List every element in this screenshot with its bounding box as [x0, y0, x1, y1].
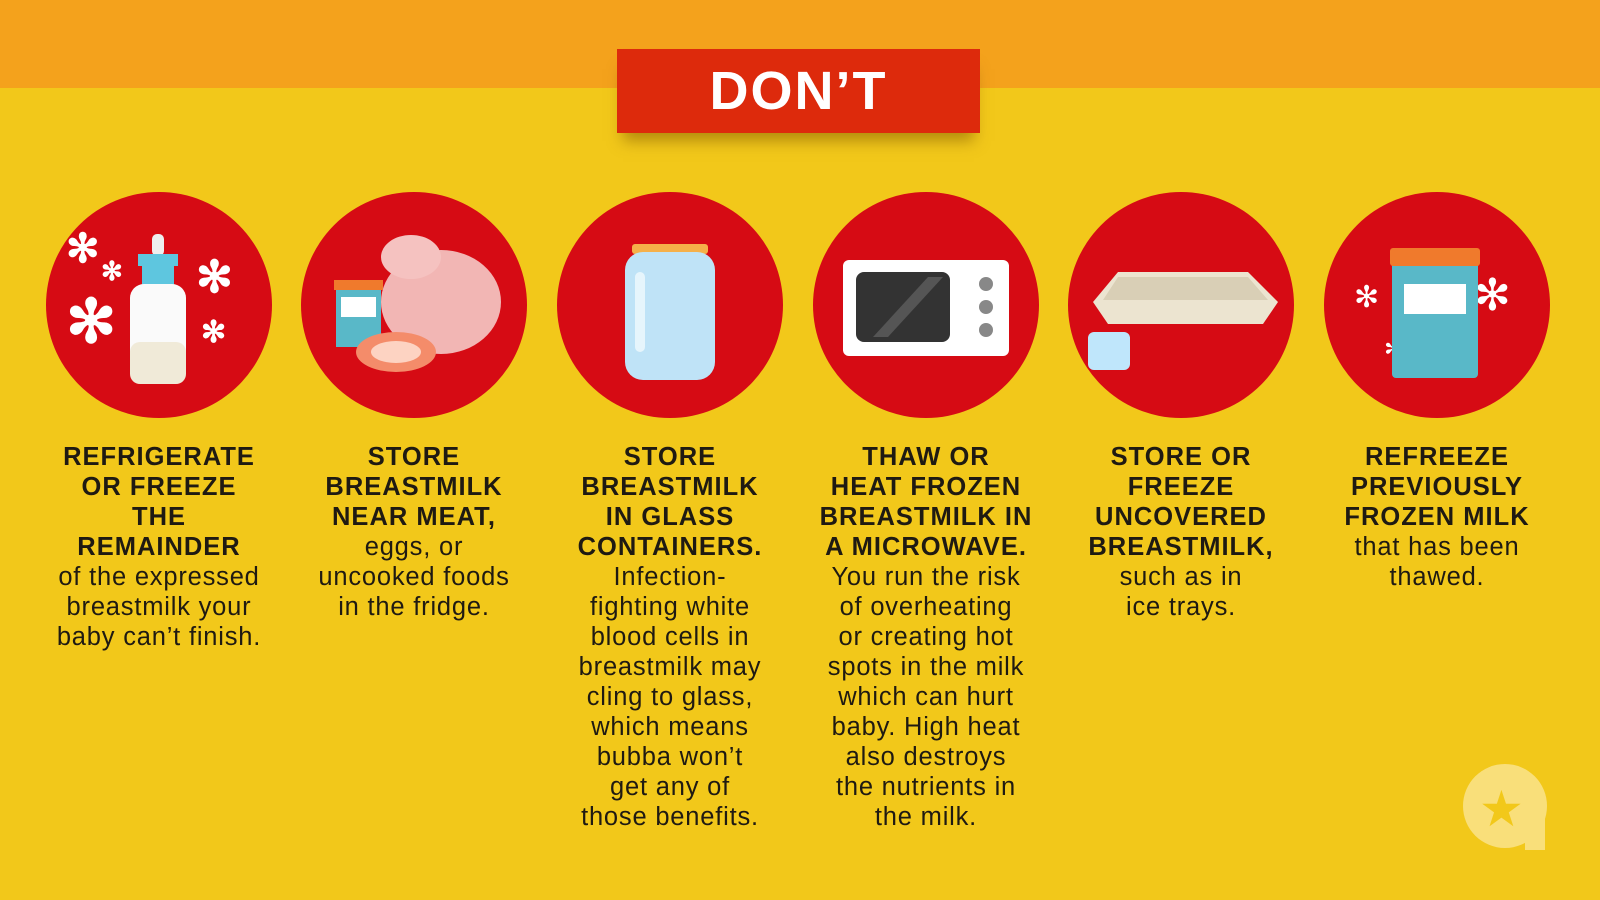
- text: get any of: [610, 773, 730, 801]
- text: STORE OR: [1111, 443, 1251, 471]
- panel: uncovered ice trays: [1068, 192, 1294, 621]
- text: UNCOVERED: [1095, 503, 1267, 531]
- icon: bottle with snowflakes: [46, 192, 272, 418]
- text: cling to glass,: [587, 683, 753, 711]
- text: also destroys: [846, 743, 1006, 771]
- text: FROZEN MILK: [1344, 503, 1530, 531]
- text: BREASTMILK IN: [820, 503, 1032, 531]
- text: or creating hot: [838, 623, 1014, 651]
- text: baby can’t finish.: [57, 623, 261, 651]
- text: Infection-: [614, 563, 726, 591]
- text: [1344, 443, 1530, 591]
- text: BREASTMILK: [581, 473, 759, 501]
- icon: ice tray: [1068, 192, 1294, 418]
- text: [820, 443, 1032, 831]
- text: eggs, or: [365, 533, 463, 561]
- icon: frozen milk container: ✻: [1384, 336, 1404, 363]
- text: [57, 443, 261, 651]
- text: ice trays.: [1126, 593, 1236, 621]
- icon: meat and milk: [301, 192, 527, 418]
- icon: bottle with snowflakes: ✻: [201, 316, 226, 349]
- text: those benefits.: [581, 803, 759, 831]
- text: baby. High heat: [832, 713, 1020, 741]
- logo: [1463, 764, 1547, 850]
- text: REFREEZE: [1365, 443, 1509, 471]
- panel: near meat: [301, 192, 527, 621]
- text: that has been: [1355, 533, 1519, 561]
- text: OR FREEZE: [82, 473, 236, 501]
- icon: microwave: [813, 192, 1039, 418]
- text: uncooked foods: [318, 563, 510, 591]
- icon: frozen milk container: [1324, 192, 1550, 418]
- text: breastmilk may: [579, 653, 761, 681]
- text: BREASTMILK: [325, 473, 503, 501]
- text: of the expressed: [58, 563, 260, 591]
- text: REFRIGERATE: [63, 443, 255, 471]
- text: spots in the milk: [828, 653, 1024, 681]
- icon: bottle with snowflakes: ✻: [66, 227, 100, 271]
- icon: bottle with snowflakes: ✻: [196, 253, 233, 302]
- text: STORE: [368, 443, 460, 471]
- text: which can hurt: [838, 683, 1014, 711]
- text: in the fridge.: [338, 593, 490, 621]
- panel: refreeze: [1324, 192, 1550, 591]
- text: fighting white: [590, 593, 750, 621]
- text: STORE: [624, 443, 716, 471]
- text: THAW OR: [862, 443, 990, 471]
- text: PREVIOUSLY: [1351, 473, 1523, 501]
- text: of overheating: [840, 593, 1012, 621]
- text: the nutrients in: [836, 773, 1016, 801]
- text: A MICROWAVE.: [825, 533, 1027, 561]
- text: You run the risk: [831, 563, 1021, 591]
- icon: frozen milk container: ✻: [1354, 281, 1379, 314]
- text: THE: [132, 503, 186, 531]
- text: which means: [591, 713, 749, 741]
- text: the milk.: [875, 803, 977, 831]
- text: CONTAINERS.: [578, 533, 762, 561]
- icon: bottle with snowflakes: ✻: [101, 256, 123, 286]
- text: [1088, 443, 1274, 621]
- text: HEAT FROZEN: [831, 473, 1021, 501]
- text: breastmilk your: [67, 593, 251, 621]
- text: [578, 443, 762, 831]
- icon: frozen milk container: ✻: [1474, 271, 1511, 320]
- text: bubba won’t: [597, 743, 743, 771]
- text: REMAINDER: [77, 533, 241, 561]
- text: FREEZE: [1128, 473, 1234, 501]
- logo: ★: [1479, 781, 1524, 837]
- text: IN GLASS: [606, 503, 734, 531]
- text: such as in: [1120, 563, 1242, 591]
- title: DON’T: [710, 61, 888, 121]
- text: [318, 443, 510, 621]
- text: BREASTMILK,: [1088, 533, 1274, 561]
- panel: refrigerate remainder: [46, 192, 272, 651]
- icon: glass jar: [557, 192, 783, 418]
- text: NEAR MEAT,: [332, 503, 496, 531]
- panel: microwave: [813, 192, 1039, 831]
- text: blood cells in: [591, 623, 749, 651]
- icon: bottle with snowflakes: ✻: [66, 288, 116, 355]
- panel: glass containers: [557, 192, 783, 831]
- title: [617, 49, 980, 133]
- text: thawed.: [1390, 563, 1484, 591]
